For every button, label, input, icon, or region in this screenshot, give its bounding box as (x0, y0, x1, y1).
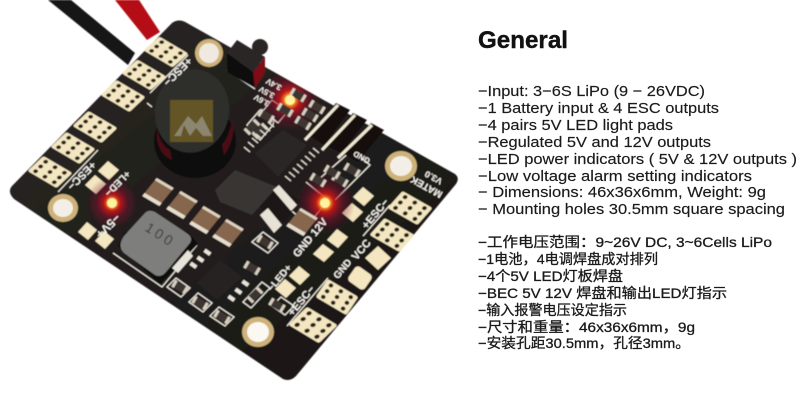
silkscreen labels: +ESC− (360, 197, 392, 232)
mounting holes (48, 39, 417, 347)
red LED glow tint (86, 68, 355, 233)
small SOIC chip (189, 249, 249, 302)
silkscreen labels: MATEK (408, 173, 445, 199)
black battery wire (48, 0, 135, 65)
English specification list: −Regulated 5V and 12V outputs (478, 134, 711, 151)
header pins (305, 103, 384, 162)
circuit board (10, 20, 458, 380)
power inductor marked 100 (118, 211, 198, 284)
product photo: power distribution board (10, 0, 458, 380)
small surface-mount resistors (171, 88, 361, 324)
English specification list: −1 Battery input & 4 ESC outputs (478, 100, 719, 117)
silkscreen labels: GND (332, 257, 354, 281)
square power pads (78, 75, 391, 298)
white silkscreen outlines (58, 55, 390, 326)
silkscreen labels: +ESC− (286, 284, 318, 319)
power regulator D2PAK (215, 170, 300, 233)
red battery wire (115, 0, 160, 40)
push button switch (227, 39, 268, 88)
title: General (478, 27, 568, 54)
English specification list: −Low voltage alarm setting indicators (478, 168, 752, 185)
ceramic capacitors (142, 178, 318, 247)
English specification list: −4 pairs 5V LED light pads (478, 117, 673, 134)
Chinese specification list: −安装孔距30.5mm，孔径3mm。 (478, 335, 690, 351)
English specification list: − Dimensions: 46x36x6mm, Weight: 9g (478, 184, 766, 201)
Chinese specification list: −BEC 5V 12V 焊盘和输出LED灯指示 (478, 285, 727, 301)
silkscreen labels: +ESC− (161, 55, 194, 88)
LED hot spots (107, 95, 330, 208)
silkscreen labels: GND 12V (291, 216, 331, 260)
English specification list (478, 83, 797, 218)
English specification list: −LED power indicators ( 5V & 12V outputs ) (478, 151, 797, 168)
Chinese specification list: −输入报警电压设定指示 (478, 302, 627, 318)
silkscreen labels: VCC (350, 237, 374, 263)
alarm buzzer (147, 62, 237, 178)
Chinese specification list: −尺寸和重量：46x36x6mm，9g (478, 319, 695, 335)
silkscreen labels: 3.5V (257, 84, 276, 100)
silkscreen labels: GND (352, 149, 372, 165)
silkscreen labels: +LED− (102, 168, 132, 198)
large regulator chip (244, 118, 319, 181)
watermark (170, 100, 213, 142)
Chinese specification list: −1电池，4电调焊盘成对排列 (478, 251, 658, 267)
Chinese specification list (478, 234, 772, 351)
silkscreen labels: −LED+ (266, 263, 295, 294)
silkscreen labels: 3.4V (264, 76, 283, 92)
Chinese specification list: −工作电压范围：9~26V DC, 3~6Cells LiPo (478, 234, 772, 250)
silkscreen labels: +ESC− (65, 159, 98, 192)
silkscreen labels: V3.0 (423, 169, 444, 186)
Chinese specification list: −4个5V LED灯板焊盘 (478, 268, 623, 284)
silkscreen labels: −5V+ (93, 211, 123, 241)
English specification list: −Input: 3−6S LiPo (9 − 26VDC) (478, 83, 705, 100)
English specification list: − Mounting holes 30.5mm square spacing (478, 201, 785, 218)
power inductor marked 100: 100 (142, 220, 178, 251)
silkscreen labels (65, 55, 445, 319)
silkscreen labels: 3.6V (252, 92, 271, 108)
solder pads with holes (28, 37, 432, 343)
